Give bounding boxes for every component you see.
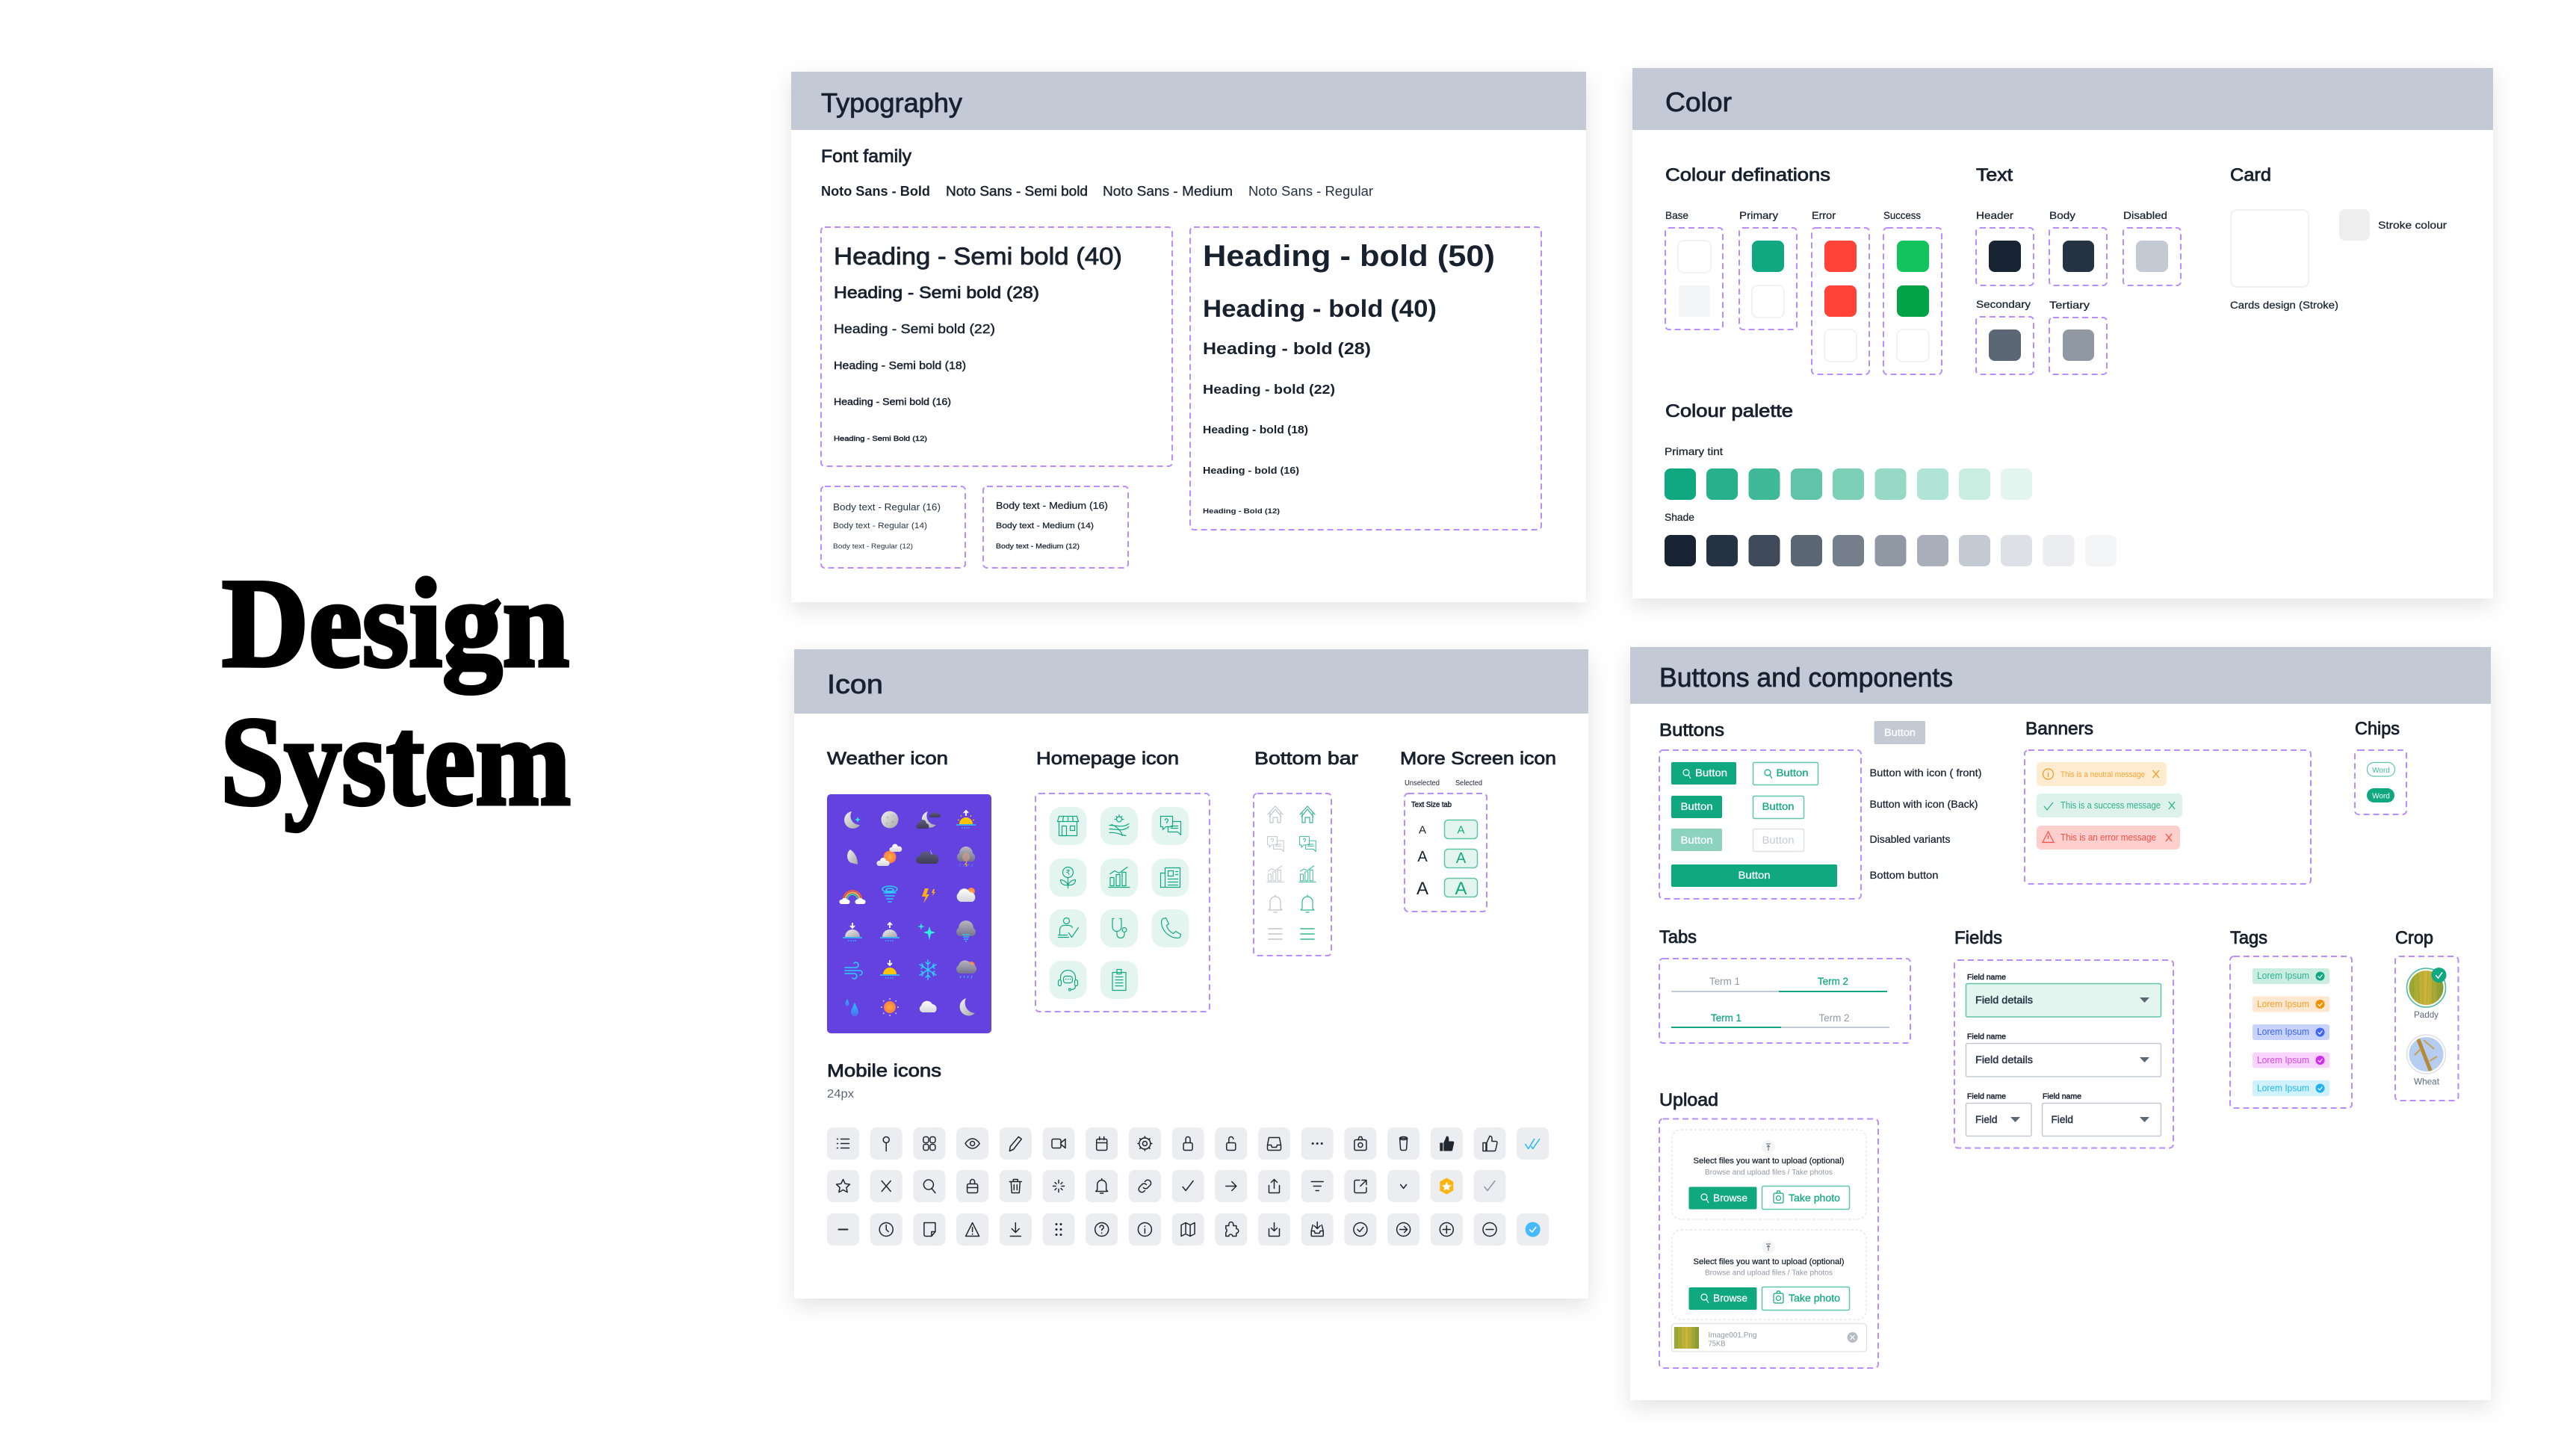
swatch group: base: Base bbox=[1665, 209, 1688, 221]
icon: sun with clouds bbox=[876, 844, 902, 866]
tag: cyan: Lorem Ipsum bbox=[2257, 1082, 2309, 1094]
button variants bbox=[1659, 750, 1861, 899]
swatch group: success bbox=[1883, 209, 1942, 374]
crop: wheat: Wheat bbox=[2414, 1076, 2440, 1086]
button: filled: Button bbox=[1681, 800, 1712, 812]
icon: home unselected bbox=[1268, 806, 1283, 823]
chip: outline: Word bbox=[2372, 767, 2390, 775]
button: outline with icon bbox=[1753, 762, 1818, 785]
tabs: Term 2 bbox=[1818, 1012, 1850, 1024]
semi bold heading samples: Heading - Semi bold (18) bbox=[834, 360, 966, 372]
icon: rupee plant: ₹ bbox=[1065, 869, 1071, 877]
font family list: Noto Sans - Semi bold bbox=[946, 184, 1088, 199]
icon: sparkles bbox=[917, 923, 935, 940]
icon: farm field bbox=[1100, 807, 1138, 845]
more screen icon: text size tabs: A bbox=[1457, 823, 1465, 837]
heading: Banners: Banners bbox=[2025, 719, 2093, 739]
heading: Upload: Upload bbox=[1659, 1090, 1718, 1110]
body medium samples: Body text - Medium (16) bbox=[996, 500, 1108, 511]
crop: paddy selected bbox=[2407, 968, 2446, 1020]
icon: bell selected bbox=[1301, 895, 1314, 912]
heading: Tabs: Tabs bbox=[1659, 927, 1697, 947]
icon: thunderstorm cloud bbox=[957, 847, 975, 867]
button: outline with icon: Button bbox=[1777, 767, 1808, 779]
bold heading samples: Heading - bold (22) bbox=[1203, 382, 1335, 397]
tag: cyan bbox=[2253, 1080, 2329, 1096]
more screen icon: text size tabs: A bbox=[1417, 879, 1428, 899]
icon: newspaper bbox=[1152, 858, 1189, 897]
swatch group: error: Error bbox=[1812, 209, 1836, 221]
icon: white cloud bbox=[920, 1001, 937, 1012]
more screen icon: text size tabs: A bbox=[1417, 849, 1428, 865]
bold heading samples: Heading - Bold (12) bbox=[1203, 507, 1280, 516]
icon: moonrise bbox=[880, 923, 900, 941]
field: active: Field details bbox=[1975, 994, 2033, 1006]
upload box: empty: Select files you want to upload (optional) bbox=[1693, 1157, 1844, 1166]
button variant labels: Button with icon (Back) bbox=[1869, 798, 1978, 810]
more screen icon: text size tabs: A bbox=[1419, 823, 1426, 837]
icon: headset support bbox=[1049, 961, 1086, 999]
icon: snowflake bbox=[920, 960, 936, 980]
more screen icon: text size tabs: Unselected bbox=[1405, 779, 1440, 788]
banner: neutral: This is a neutral message bbox=[2061, 770, 2145, 779]
button: filled bbox=[1671, 796, 1722, 818]
card design sample bbox=[2230, 210, 2338, 311]
icon: sun bbox=[881, 998, 899, 1016]
panel: typography bbox=[791, 72, 1586, 602]
icon: lightning bbox=[922, 888, 935, 903]
icon: home selected bbox=[1300, 806, 1315, 823]
heading: Buttons and components: Buttons and components bbox=[1659, 662, 1953, 693]
tags bbox=[2230, 956, 2352, 1108]
icon: crescent with star bbox=[844, 811, 861, 829]
body regular samples: Body text - Regular (14) bbox=[833, 522, 927, 530]
semi bold heading samples: Heading - Semi bold (22) bbox=[834, 321, 995, 336]
button variant labels: Button with icon ( front) bbox=[1869, 767, 1981, 779]
mobile icons grid bbox=[827, 1127, 1549, 1246]
icon: person with check bbox=[1049, 909, 1086, 947]
semi bold heading samples bbox=[821, 227, 1172, 466]
icon: bell unselected bbox=[1269, 895, 1282, 912]
icon: growth chart bbox=[1100, 858, 1138, 897]
body regular samples: Body text - Regular (16) bbox=[833, 501, 941, 513]
heading: Mobile icons: Mobile icons bbox=[827, 1061, 941, 1081]
button: outline: Button bbox=[1762, 800, 1795, 812]
heading: More Screen icon: More Screen icon bbox=[1400, 749, 1556, 769]
button variant labels: Disabled variants bbox=[1869, 833, 1950, 845]
disabled button: Button bbox=[1884, 726, 1916, 738]
banners bbox=[2025, 750, 2311, 884]
heading: Bottom bar: Bottom bar bbox=[1254, 749, 1358, 769]
button: filled with icon bbox=[1671, 762, 1736, 785]
icon: clipboard bbox=[1100, 961, 1138, 999]
button: disabled filled bbox=[1671, 829, 1722, 851]
icon: chart selected bbox=[1299, 866, 1316, 882]
button: disabled outline bbox=[1753, 829, 1803, 852]
font family list: Noto Sans - Regular bbox=[1248, 184, 1373, 199]
icon: rainy cloud with sun bbox=[956, 960, 976, 978]
panel: color bbox=[1632, 68, 2493, 598]
icon: stethoscope bbox=[1100, 909, 1138, 947]
field: active: Field name bbox=[1967, 974, 2006, 982]
icon: menu unselected bbox=[1269, 929, 1282, 939]
swatch group: primary bbox=[1739, 209, 1797, 329]
field: default bbox=[1966, 1033, 2161, 1077]
disabled button bbox=[1874, 721, 1925, 744]
upload box: empty: Browse and upload files / Take photos bbox=[1705, 1169, 1833, 1177]
heading: Fields: Fields bbox=[1954, 928, 2002, 948]
field: medium: Field bbox=[2052, 1113, 2073, 1125]
swatch: header text bbox=[1976, 209, 2034, 285]
icon: phone bbox=[1152, 909, 1189, 947]
heading: Icon: Icon bbox=[827, 669, 883, 699]
crop: paddy selected: Paddy bbox=[2414, 1009, 2439, 1020]
icon: half moon bbox=[847, 850, 858, 864]
icon: rainbow bbox=[839, 891, 866, 904]
button variant labels bbox=[1869, 767, 1981, 881]
field: medium bbox=[2043, 1092, 2161, 1136]
upload box: with file bbox=[1672, 1230, 1866, 1319]
body medium samples bbox=[983, 486, 1128, 568]
icon: chart unselected bbox=[1267, 866, 1284, 882]
upload box: with file: Take photo bbox=[1789, 1292, 1840, 1304]
semi bold heading samples: Heading - Semi bold (40) bbox=[834, 243, 1122, 270]
caption: 24px: 24px bbox=[827, 1088, 854, 1101]
heading: Font family: Font family bbox=[821, 146, 911, 167]
heading: Tags: Tags bbox=[2230, 928, 2267, 948]
icon: full moon bbox=[882, 811, 898, 828]
upload box: with file: Browse bbox=[1713, 1292, 1747, 1304]
palette: shade: Shade bbox=[1665, 511, 1694, 523]
heading: Weather icon: Weather icon bbox=[827, 749, 948, 769]
chip: filled: Word bbox=[2372, 792, 2390, 801]
field: default: Field name bbox=[1967, 1033, 2006, 1042]
more screen icon: text size tabs bbox=[1405, 779, 1487, 912]
heading: Crop: Crop bbox=[2395, 928, 2433, 948]
banner: error bbox=[2037, 826, 2180, 850]
weather icon panel bbox=[827, 794, 991, 1033]
heading: Chips: Chips bbox=[2355, 719, 2400, 739]
swatch group: primary: Primary bbox=[1739, 209, 1778, 221]
uploaded file row bbox=[1672, 1324, 1866, 1352]
icon: chat selected bbox=[1300, 837, 1316, 852]
field: medium: Field name bbox=[2043, 1092, 2081, 1101]
icon: water drops bbox=[846, 999, 858, 1016]
bold heading samples: Heading - bold (40) bbox=[1203, 295, 1437, 322]
upload box: with file: Browse and upload files / Take photos bbox=[1705, 1269, 1833, 1278]
heading: Card: Card bbox=[2230, 165, 2271, 185]
stroke colour swatch bbox=[2339, 209, 2447, 241]
heading: Color: Color bbox=[1665, 87, 1732, 117]
crop: wheat bbox=[2407, 1035, 2446, 1086]
upload box: with file: Select files you want to upload (optional) bbox=[1693, 1257, 1844, 1266]
swatch: tertiary text bbox=[2049, 299, 2107, 374]
icon: question chat bbox=[1152, 807, 1189, 845]
icon: rupee plant bbox=[1049, 858, 1086, 897]
swatch: disabled text bbox=[2123, 209, 2181, 285]
crop selector bbox=[2395, 956, 2458, 1101]
icon: hazy cloud bbox=[956, 921, 976, 941]
swatch group: error bbox=[1812, 209, 1869, 374]
icon: cloud with sun bbox=[957, 888, 975, 902]
heading: Homepage icon: Homepage icon bbox=[1036, 749, 1179, 769]
panel: icon bbox=[794, 649, 1588, 1299]
body medium samples: Body text - Medium (12) bbox=[996, 542, 1080, 551]
tag: blue bbox=[2253, 1024, 2329, 1040]
swatch group: success: Success bbox=[1883, 209, 1921, 221]
title: Design bbox=[222, 553, 569, 693]
icon: sunset bbox=[880, 960, 900, 978]
tabs: Term 2 bbox=[1818, 975, 1848, 987]
bold heading samples: Heading - bold (18) bbox=[1203, 424, 1308, 436]
tag: green bbox=[2253, 968, 2329, 984]
field: small: Field name bbox=[1967, 1092, 2006, 1101]
swatch: secondary text bbox=[1976, 298, 2034, 374]
chips bbox=[2355, 750, 2406, 814]
tabs: Term 1 bbox=[1709, 975, 1740, 987]
button: disabled outline: Button bbox=[1762, 834, 1795, 846]
homepage icon set bbox=[1035, 793, 1210, 1012]
field: active bbox=[1966, 974, 2161, 1017]
heading: Colour palette: Colour palette bbox=[1665, 401, 1793, 421]
upload box: empty: Browse bbox=[1713, 1192, 1747, 1204]
bottom bar icon set bbox=[1254, 793, 1331, 956]
tag: blue: Lorem Ipsum bbox=[2257, 1026, 2309, 1037]
panel: buttons and components bbox=[1630, 647, 2491, 1400]
swatch group: base bbox=[1665, 209, 1723, 329]
banner: success: This is a success message bbox=[2061, 800, 2161, 811]
title bbox=[220, 553, 571, 832]
button: disabled filled: Button bbox=[1681, 834, 1712, 846]
icon: crescent moon bbox=[960, 998, 975, 1015]
icon: chat unselected bbox=[1268, 837, 1284, 852]
icon: menu selected bbox=[1301, 929, 1314, 939]
palette: shade bbox=[1665, 511, 2117, 566]
bold heading samples: Heading - bold (28) bbox=[1203, 339, 1371, 358]
heading: Colour definations: Colour definations bbox=[1665, 165, 1830, 185]
title: System bbox=[220, 691, 571, 832]
icon: wind bbox=[845, 962, 862, 979]
field: small: Field bbox=[1975, 1113, 1998, 1125]
font family list: Noto Sans - Bold bbox=[821, 184, 930, 199]
button variant labels: Bottom button bbox=[1869, 869, 1938, 881]
font family list: Noto Sans - Medium bbox=[1103, 184, 1233, 199]
body regular samples: Body text - Regular (12) bbox=[833, 542, 913, 551]
tag: pink: Lorem Ipsum bbox=[2257, 1054, 2309, 1065]
palette: primary tint: Primary tint bbox=[1665, 445, 1723, 457]
bold heading samples: Heading - bold (16) bbox=[1203, 465, 1299, 476]
font family list bbox=[821, 184, 1373, 199]
tag: pink bbox=[2253, 1052, 2329, 1068]
icon: store bbox=[1049, 807, 1086, 845]
more screen icon: text size tabs: Text Size tab bbox=[1411, 801, 1452, 809]
semi bold heading samples: Heading - Semi bold (16) bbox=[834, 396, 951, 407]
swatch: tertiary text: Tertiary bbox=[2049, 299, 2090, 311]
swatch: disabled text: Disabled bbox=[2123, 209, 2167, 221]
icon: tornado bbox=[882, 886, 897, 902]
stroke colour swatch: Stroke colour bbox=[2378, 219, 2447, 231]
more screen icon: text size tabs: Selected bbox=[1455, 779, 1482, 788]
button: bottom button bbox=[1671, 864, 1837, 887]
upload component bbox=[1659, 1119, 1878, 1368]
button: outline bbox=[1753, 796, 1803, 819]
tag: orange bbox=[2253, 997, 2329, 1012]
uploaded file row: Image001.Png bbox=[1708, 1331, 1757, 1340]
body medium samples: Body text - Medium (14) bbox=[996, 522, 1094, 530]
banner: error: This is an error message bbox=[2061, 832, 2156, 843]
heading: Buttons: Buttons bbox=[1659, 720, 1724, 740]
tag: green: Lorem Ipsum bbox=[2257, 970, 2309, 981]
uploaded file row: 75KB bbox=[1708, 1340, 1726, 1348]
icon: dark cloud and moon bbox=[916, 850, 938, 864]
bold heading samples bbox=[1190, 227, 1541, 530]
semi bold heading samples: Heading - Semi bold (28) bbox=[834, 283, 1039, 302]
swatch: body text bbox=[2049, 209, 2107, 285]
icon: sunrise bbox=[956, 811, 976, 828]
fields bbox=[1954, 960, 2173, 1148]
swatch: body text: Body bbox=[2049, 209, 2075, 221]
card design sample: Cards design (Stroke) bbox=[2230, 299, 2338, 311]
more screen icon: text size tabs: A bbox=[1455, 879, 1467, 899]
palette: primary tint bbox=[1665, 445, 2032, 500]
icon: moonset bbox=[843, 923, 862, 941]
heading: Text: Text bbox=[1976, 165, 2013, 185]
icon: moon with dark clouds bbox=[917, 811, 941, 829]
tabs: Term 1 bbox=[1711, 1012, 1741, 1024]
field: default: Field details bbox=[1975, 1053, 2033, 1065]
swatch: header text: Header bbox=[1976, 209, 2013, 221]
field: small bbox=[1966, 1092, 2031, 1136]
tabs bbox=[1659, 959, 1910, 1043]
body regular samples bbox=[821, 486, 965, 568]
button: filled with icon: Button bbox=[1695, 767, 1727, 779]
upload box: empty bbox=[1672, 1130, 1866, 1219]
bold heading samples: Heading - bold (50) bbox=[1203, 240, 1495, 273]
upload box: empty: Take photo bbox=[1789, 1192, 1840, 1204]
swatch: secondary text: Secondary bbox=[1976, 298, 2031, 310]
button: bottom button: Button bbox=[1738, 869, 1771, 881]
more screen icon: text size tabs: A bbox=[1456, 850, 1467, 867]
heading: Typography: Typography bbox=[821, 87, 962, 118]
banner: neutral bbox=[2037, 762, 2167, 786]
tag: orange: Lorem Ipsum bbox=[2257, 998, 2309, 1009]
banner: success bbox=[2037, 793, 2182, 817]
semi bold heading samples: Heading - Semi Bold (12) bbox=[834, 435, 927, 443]
